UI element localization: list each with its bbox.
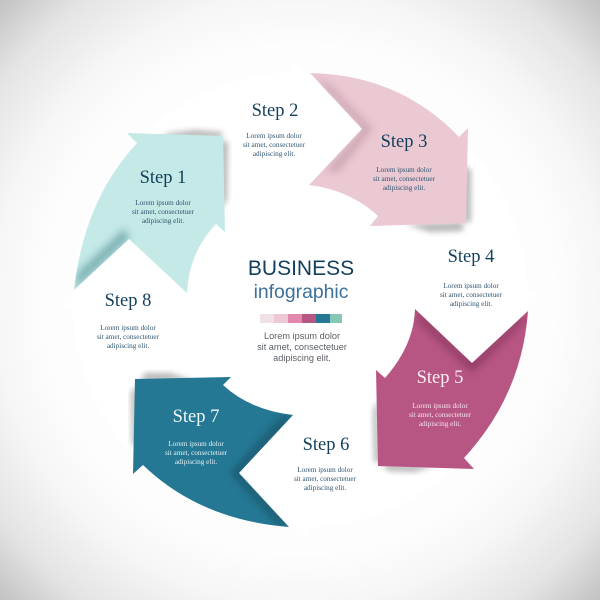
step 8 text: adipiscing elit. xyxy=(107,342,149,350)
step 2 text xyxy=(243,101,306,158)
step 1 text: Step 1 xyxy=(140,168,186,188)
step 3 text xyxy=(373,132,436,192)
step 8 text xyxy=(97,291,160,350)
step 7 text: Lorem ipsum dolor xyxy=(168,440,224,448)
step 8 text: Step 8 xyxy=(105,291,151,311)
step 7 text: sit amet, consectetuer xyxy=(165,449,228,457)
centre body text: adipiscing elit. xyxy=(273,353,331,363)
arrow: step 1 xyxy=(74,133,225,293)
centre heading xyxy=(248,257,354,303)
step 2 text: sit amet, consectetuer xyxy=(243,141,306,149)
centre body text: Lorem ipsum dolor xyxy=(264,331,340,341)
step 6 text: adipiscing elit. xyxy=(304,484,346,492)
step 4 text: sit amet, consectetuer xyxy=(440,291,503,299)
step 5 text: adipiscing elit. xyxy=(419,420,461,428)
drop shadows behind arrows xyxy=(131,130,471,472)
arrow: step 5 xyxy=(376,309,528,469)
step 3 text: Lorem ipsum dolor xyxy=(376,166,432,174)
step 6 text: Lorem ipsum dolor xyxy=(297,466,353,474)
step 1 text: adipiscing elit. xyxy=(142,217,184,225)
white circle with step arrow tips xyxy=(60,62,540,540)
arrow: step 7 xyxy=(133,377,293,527)
step 5 text xyxy=(409,368,472,428)
step 4 text xyxy=(440,247,503,308)
step 2 text: adipiscing elit. xyxy=(253,150,295,158)
step 6 text: Step 6 xyxy=(303,435,349,455)
centre body text xyxy=(257,331,347,363)
colour palette strip xyxy=(260,314,342,323)
step 3 text: sit amet, consectetuer xyxy=(373,175,436,183)
step 3 text: adipiscing elit. xyxy=(383,184,425,192)
step 8 text: sit amet, consectetuer xyxy=(97,333,160,341)
step 5 text: sit amet, consectetuer xyxy=(409,411,472,419)
step 4 text: Lorem ipsum dolor xyxy=(443,282,499,290)
step 7 text: adipiscing elit. xyxy=(175,458,217,466)
step 3 text: Step 3 xyxy=(381,132,427,152)
step 8 text: Lorem ipsum dolor xyxy=(100,324,156,332)
step 5 text: Lorem ipsum dolor xyxy=(412,402,468,410)
step 4 text: Step 4 xyxy=(448,247,494,267)
step 4 text: adipiscing elit. xyxy=(450,300,492,308)
step 1 text: Lorem ipsum dolor xyxy=(135,199,191,207)
centre body text: sit amet, consectetuer xyxy=(257,342,347,352)
step 2 text: Step 2 xyxy=(252,101,298,121)
step 7 text xyxy=(165,407,228,466)
step 5 text: Step 5 xyxy=(417,368,463,388)
step 1 text: sit amet, consectetuer xyxy=(132,208,195,216)
step 6 text xyxy=(294,435,357,492)
centre heading: BUSINESS xyxy=(248,257,354,280)
step 6 text: sit amet, consectetuer xyxy=(294,475,357,483)
step 7 text: Step 7 xyxy=(173,407,219,427)
arrow: step 3 xyxy=(309,73,468,226)
step 2 text: Lorem ipsum dolor xyxy=(246,132,302,140)
step 1 text xyxy=(132,168,195,225)
centre heading: infographic xyxy=(254,281,349,303)
